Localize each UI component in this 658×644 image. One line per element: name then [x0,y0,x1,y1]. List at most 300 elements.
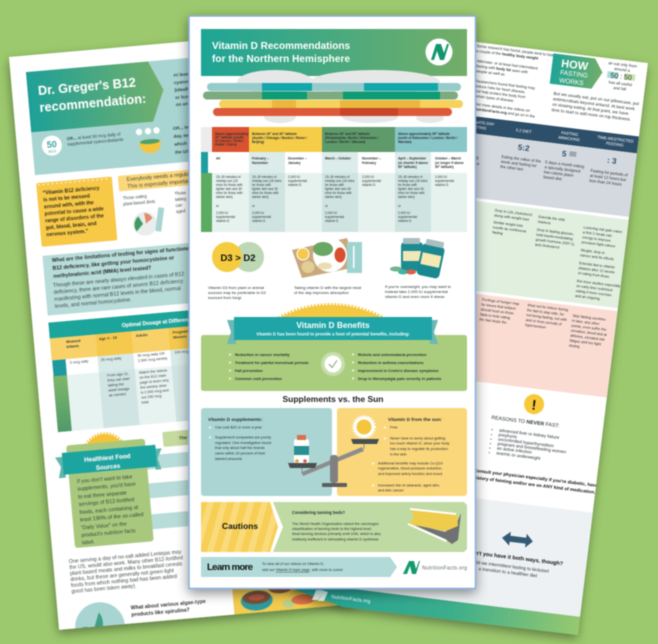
text: reasons to never fast: uncontrolled hyperthyroidism [498,437,554,448]
text: overweight: instead take 2,000 IU supplemental [385,289,448,294]
icon: sun rays over benefits banner [277,302,386,318]
icon: tanning bed [408,508,461,544]
logo: NutritionFacts.org: NutritionFacts.org [422,566,467,572]
text: weight intro: Some research has found, people tend to lose [477,44,554,57]
table: recommendations by latitude: vitamin D [435,183,449,187]
panel: vitamin D supplements: Supplement companies are poorly [215,436,271,440]
text: overweight: If you're overweight, you may want to [385,284,452,289]
text: lentejas paragraph: good has been taken away). [71,583,137,595]
map: latitude bands [203,70,463,123]
table: optimal dosage: is 2,500 mcg and [141,388,169,395]
heading: vitamin D recommendations: for the Northern Hemisphere [212,54,350,65]
panel: vitamin D from the sun: regeneration, blood pressure reduction, [378,466,442,470]
text: overweight [385,284,452,299]
list: food source stripes: *Only some [201,528,217,533]
text: D3 preferable: sources may be preferable to D2 [208,290,267,295]
panel: vitamin D from the sun: Free [390,426,398,430]
list: benefits right: Reduction in asthma exacerbations [358,360,424,365]
table: optimal dosage: 2,500 mcg weekly [138,356,168,363]
list: benefits left: Treatment for painful menstrual periods [235,360,309,365]
table: recommendations by latitude: (or longer if above [435,161,464,165]
table: green benefits row: precision fight cancer [581,240,616,248]
panel: left page, B12 recommendation [9,31,361,644]
list: food source stripes: Trader Joe's [196,450,225,458]
text: OR block: which contains [173,139,207,147]
list: benefits left [235,352,309,381]
table: recommendations by latitude [201,127,467,232]
text: weight intro: fasting with body fat seen with [476,64,528,74]
table: pink risks row: fatigue and too tight [569,339,601,346]
text: weight intro: people as well as [475,69,505,77]
text: at least block: or lozenge) [175,93,200,100]
list: benefits right: Improvement in Crohn's disease symptoms [358,368,438,373]
table: grey description row: 5 [562,149,568,159]
table: green benefits row: and an ongoing [575,294,600,301]
table: green benefits row: on early time restricted [576,284,613,292]
table: recommendations by latitude: mins for those with [325,191,352,195]
callout: 50 : 50: an eat only from [608,60,638,69]
panel: limitations of testing: What are the limitations of testing for signs of functional [52,246,191,264]
table: recommendations by latitude: November – [362,156,381,160]
panel: vitamin D supplements [201,408,332,496]
callout: yellow quote: nervous system.” [46,229,89,238]
icon: check [321,352,345,376]
label: cautions chevron [201,502,278,552]
text: consult your physician: history of fainting and/or are on ANY kind of medication. [473,475,596,495]
table: recommendations by latitude: 15–30 minutes of [398,175,423,179]
callout: 50 : 50: has all useful [608,79,632,87]
panel: learn more: Learn more [207,562,253,573]
table: recommendations by latitude: (or shorter if above [398,161,428,165]
table: recommendations by latitude: April – September [398,156,427,160]
panel: both ways: Could we intermittent fasting to kickstart [468,559,550,574]
table: recommendations by latitude: January [288,161,301,165]
heading: Dr. Greger's B12 recommendation: Dr. Greger's B12 [37,76,136,98]
banner: benefits title [227,317,438,344]
table: green benefits row [476,201,628,308]
callout: yellow quote: potential to cause a wide [44,206,104,217]
table: recommendations by latitude: supplemental [435,179,454,183]
list: benefits left: Reduction in cancer mortality [235,352,291,357]
table: pink risks row: Feelings of hunger may [482,298,520,306]
icon: algae circle [74,602,126,629]
panel: vitamin D supplements: Can cost $10 or more a year [215,426,263,430]
panel: healthiest food sources text: label. [82,539,95,546]
table: green benefits row: markers [538,220,551,225]
list: benefits right: Rickets and osteomalacia prevention [358,352,427,357]
table: pink risks row: Must not be indoor during [527,303,568,312]
banner: healthiest food sources: Sources [96,463,121,472]
text: weight intro [469,44,554,120]
table: recommendations by latitude: (Austin / Chicago / Boston / Rome / [252,136,307,140]
text: lentejas paragraph: One serving a day of no-salt added Lentejas may [69,549,182,565]
panel: limitations of testing: manifesting with normal B12 levels in the blood, normal [54,286,181,303]
text box: but we usually eat: antimicrobials beyond antacid. At best work [553,96,636,111]
callout: everybody needs a regular source [117,169,189,192]
text box: but we usually eat [551,91,640,123]
table: green benefits row: growth hormone (IGF-1), [535,238,575,246]
panel: vitamin D from the sun: has a way to regulate its production [390,447,448,451]
panel: both ways [370,498,592,616]
callout: yellow quote: is not to be messed [43,193,90,204]
table: recommendations by latitude: darker skin) [398,195,415,199]
table: green benefits row: But more studies especially [577,279,621,288]
table: recommendations by latitude: 2,000 IU [435,175,448,179]
table: pink risks row: athletes, elevated risk [570,334,605,342]
table: pink risks row: dosing [569,343,580,349]
text box: but we usually eat: But we usually eat, put on our pillowcase, put [553,91,640,106]
panel: vitamin D from the sun: Vitamin D from the sun: [388,417,442,423]
icon: D3 > D2: D3 > D2 [220,253,256,264]
list: benefits left: Fall prevention [235,368,263,373]
table: pink risks row: hypertension [525,323,546,329]
panel: healthiest food sources text: foods, each containing at [79,505,139,516]
table: grey description row: (ADF) twice [458,159,480,166]
text: what about algae: products like spirulina? [131,607,190,618]
text: those eating plant-based diets: can [175,202,183,208]
table: optimal dosage: Women [173,335,188,340]
text: those eating plant-based diets: aged [176,208,186,214]
text: at least block: on an empty [176,100,203,107]
table: recommendations by latitude: October – March [435,156,461,160]
table: pink risks row: the fast stops the [479,317,507,325]
text box: the ...: The Best [179,434,199,441]
panel: healthiest food sources text [66,439,154,548]
table: recommendations by latitude: March – October [325,156,352,160]
icon: supplement bottles [390,238,446,279]
table: recommendations by latitude: mins for those with [398,191,425,195]
icon: D3 > D2 [212,242,264,272]
text: D3 preferable: Vitamin D3 from plant or animal [208,285,264,290]
text: those eating plant-based diets: Those eating [123,193,148,201]
table: grey description row: weight [455,182,468,189]
text box: the ... [162,429,189,448]
table: grey description row: week and fasting for [501,159,537,168]
text: tanning beds: classification of tanning beds to the highest level. [292,527,372,531]
icon: logo [426,38,452,66]
heading: how fasting works: HOW [561,58,589,73]
panel: vitamin D from the sun [337,408,467,496]
panel: healthiest food sources text: product's nutrition facts [81,528,136,539]
table: recommendations by latitude: for those with [398,183,417,187]
table: recommendations by latitude: vitamin D [288,183,302,187]
table: grey description row: 5:2 [517,143,531,153]
table: recommendations by latitude: vitamin D [216,219,230,223]
text: OR block: day, each at [173,132,200,139]
heading: vitamin D recommendations: Vitamin D Recommendations [212,41,350,52]
table: optimal dosage: the weekly dose [140,384,167,390]
text: 50 mcg daily: OR... at least 50 mcg daily of [67,132,121,141]
text: lentejas paragraph: plant-based meats and milks to breakfast cereals [70,561,183,577]
text: weight intro: Researchers found that fasting may [475,79,535,90]
heading: how fasting works [550,53,604,90]
callout: 50 : 50: around a [614,66,631,73]
table: green benefits row: Weight, drop in [580,248,605,255]
table: green benefits row: of eating from those [578,271,610,279]
table header row: ALTERNATE-DAY [462,118,495,127]
text: at least block [173,72,189,107]
table: green benefits row: energy to improve [582,235,611,243]
table: recommendations by latitude: vitamin D [252,219,266,223]
table: grey description row: restriction [457,171,475,178]
panel: vitamin D from the sun: in the skin [390,452,407,456]
callout: 50 : 50 [606,62,638,91]
banner: benefits title: Vitamin D has been found to provide a host of potential benefits, including: [256,332,410,336]
table: recommendations by latitude: 50° latitude) [435,165,454,169]
table: recommendations by latitude: mins for those with [252,191,279,195]
panel: healthiest food sources text: supplements, you'd have [77,482,136,493]
table: optimal dosage: Watch the videos [139,368,167,375]
table: pink risks row: in later, any other [572,319,600,326]
table: recommendations by latitude: 15–30 minutes of [325,175,350,179]
heading: vitamin D recommendations [201,29,467,76]
table: recommendations by latitude: December – [288,156,307,160]
table: pink risks row: elevation, blood and at [571,329,607,337]
table: grey description row: 5 days a month eating [545,159,585,169]
table: grey description row: at least 12 hours but [590,173,627,182]
callout: 50 : 50: and fall [613,85,627,92]
table: optimal dosage: on the B12 main [139,374,166,380]
text: tanning beds: Most tanning devices primarily emit UVA, which is also [292,532,381,536]
table: optimal dosage: total [141,400,149,405]
text: overweight: vitamin D and even more if obese [385,294,445,299]
table: grey description row: Fasting for periods of [590,168,629,177]
table: grey description row: 2 [465,134,471,145]
table: recommendations by latitude: November [252,161,269,165]
footer band: NutritionFacts.org: NutritionFacts.org [331,594,371,605]
label: cautions chevron: Cautions [222,521,258,531]
list: food source stripes: Bob's Red Mill [197,464,230,473]
panel: learn more: To view all of our videos on Vitamin D, [262,562,324,566]
heading: supplements vs the sun: Supplements vs. the Sun [282,394,384,404]
heading: how fasting works: FASTING [560,69,588,80]
panel: right page, how fasting works [282,26,654,635]
table: recommendations by latitude: 2,000 IU [398,211,411,215]
table: recommendations by latitude: Between 40° and 50° latitude [325,132,370,136]
text: weight intro: a couple of the healthy body weight [476,49,539,61]
icon: balance scale [288,435,379,487]
table: optimal dosage: 5 mcg daily [70,359,89,365]
table: optimal dosage [48,310,189,433]
text: reasons to never fast: an active infection [497,445,533,455]
text: OR block: the US [175,149,189,155]
table: green benefits row: a first 2 meals can [583,230,612,238]
text: largest meal: Taking vitamin D with the largest meal [294,285,361,290]
text: those eating plant-based diets: Those [174,190,187,196]
list: food source stripes: Red Star [199,480,219,488]
table: recommendations by latitude: darker skin) [216,195,233,199]
table: recommendations by latitude: for those with [252,183,271,187]
icon: 50 mcg badge: 50 [46,139,57,150]
table: recommendations by latitude: Above approximately [215,132,249,136]
table: recommendations by latitude: Warsaw) [398,140,411,144]
panel: limitations of testing: methylmalonic acid (MMA) level tested? [53,265,152,280]
table: grey description row: a specially designed [544,164,581,174]
table: recommendations by latitude: 20° latitude (south [215,136,244,140]
table: recommendations by latitude: supplemental [216,215,235,219]
panel: vitamin D from the sun: and improved artery function and mood [378,472,442,476]
table: green benefits row: along with weight loss [494,213,529,222]
table: recommendations by latitude: lighter skin and 30 [252,187,278,191]
table: grey description row: : 3 [607,156,618,166]
panel: vitamin D benefits [201,317,467,391]
table: recommendations by latitude: lighter skin and 30 [398,187,424,191]
text box: but we usually eat: time to start to add more on top thickness. [551,107,631,122]
table: recommendations by latitude: (north of Edmonton / London / Berlin / [398,136,458,140]
table: pink risks row [476,294,618,398]
icon: meal tray [292,238,362,278]
panel: healthiest food sources text: “Daily Value” on the [81,521,127,531]
table: recommendations by latitude: Beijing) [252,140,264,144]
text: reasons to never fast [487,415,570,464]
table: recommendations by latitude: vitamin D [325,219,339,223]
icon: warning: ! [531,396,537,413]
table: recommendations by latitude: 15–30 minutes of [216,175,241,179]
table: optimal dosage: page to learn why [140,378,169,385]
callout: 50 : 50: 50 : 50 [610,73,632,82]
table header row: FASTING [469,124,487,131]
panel: vitamin D from the sun: Increased risk of cataracts, aged skin, [378,484,440,488]
panel: center page, vitamin D recommendations [189,16,476,588]
table: recommendations by latitude: darker skin) [252,195,269,199]
list: food source stripes: NOW Foods [200,495,228,503]
icon: 50 mcg badge [41,135,63,156]
table: recommendations by latitude: 2,000 IU [216,211,229,215]
table: grey description row: low-calorie plant- [544,169,575,178]
table: optimal dosage: they can start [107,377,130,383]
table: optimal dosage: 100 mcg daily [174,349,197,355]
text: those eating plant-based diets [122,191,187,214]
table: recommendations by latitude: or [398,204,402,208]
table: optimal dosage: 25 mcg daily [101,356,122,362]
list: benefits left: Common cold prevention [235,376,283,381]
callout: everybody needs a regular source: Everybody needs a regular [126,172,191,183]
table: recommendations by latitude: supplemental [288,179,307,183]
text: weight intro: Get more details in the videos on [474,102,530,113]
table: recommendations by latitude: 2,000 IU [325,211,338,215]
table: recommendations by latitude: All [216,156,220,160]
banner: healthiest food sources: Healthiest Food [84,453,131,464]
panel: limitations of testing [42,242,189,316]
text: tanning beds [292,510,381,542]
table: recommendations by latitude: February – [252,156,269,160]
table: recommendations by latitude: or [325,204,329,208]
text: OR block [172,126,189,154]
banner: benefits title: Vitamin D Benefits [296,320,370,330]
text: D3 preferable: sourced from fungi [208,295,241,300]
table: optimal dosage: From age 11, [107,372,129,378]
table: pink risks row: be issues that subject [481,303,516,311]
table: recommendations by latitude: lighter skin and 30 [325,187,351,191]
table: recommendations by latitude: midday sun (15 mins [325,179,355,183]
table: recommendations by latitude: vitamin D [398,219,412,223]
table: optimal dosage: 50 mcg daily OR [137,352,165,358]
table: green benefits row: Drop in LDL cholesterol [495,208,532,217]
panel: vitamin D supplements: came within 10 percent of their [215,452,266,456]
table: recommendations by latitude: supplemental [252,215,271,219]
table: recommendations by latitude: 15–30 minutes of [252,175,277,179]
table: recommendations by latitude: 2,000 IU [362,175,375,179]
table: green benefits row: total insulin-modulating [536,233,573,241]
panel: learn more: visit our Vitamin D topic page, with more to come! [262,568,343,572]
panel: healthiest food sources text: to eat three separate [78,490,127,500]
list: food source stripes: 2 mcg [209,502,217,506]
panel: healthiest food sources text: least 190% of the so-called [80,512,144,524]
panel: healthiest food sources text: If you don't want to take [77,474,133,485]
text: at least block: At least once [173,70,202,78]
panel: limitations of testing: B12 deficiency, like getting your homocysteine or [52,255,174,272]
table: recommendations by latitude: London / Berlin / Warsaw) [325,140,365,144]
panel: vitamin D supplements: Vitamin D supplements: [208,417,263,423]
table: recommendations by latitude: of Cancun / Delhi / [215,139,244,143]
table: green benefits row: Lowering risk gain eaten [583,225,622,234]
table: green benefits row: fasting [492,230,503,236]
table: grey description row: Alternate [460,147,477,154]
table: grey description row: less than 24 hours [589,178,622,187]
panel: limitations of testing: levels, and normal homocysteine. [55,297,132,310]
text: weight intro: and help protect the body from [474,89,526,99]
table: optimal dosage: Age 4 - 18 [99,336,117,341]
table: recommendations by latitude: mins for those with [216,191,243,195]
table: grey description row: eating, [456,177,469,183]
text: at least block: (ideally chewable [174,84,213,93]
table: recommendations by latitude: vitamin D [362,183,376,187]
table: green benefits row: Drop in fasting glucose, [537,228,574,236]
panel: limitations of testing: deficiency, there are rare cases of severe B12 deficiency [53,279,184,296]
list: benefits right: Drop in fibromyalgia pain severity in patients [358,376,441,381]
text: reasons to never fast: porphyria [498,432,518,439]
text: lentejas paragraph: drinks, but these are generally not green light [70,568,175,583]
panel: healthiest food sources text: servings of B12-fortified [79,497,135,508]
table: recommendations by latitude: (Philadelphia / Berlin / Edmonton / [325,136,379,140]
list: food source stripes: 12 mcg [207,486,218,491]
table: recommendations by latitude: supplemental [398,215,417,219]
callout: yellow quote [36,176,117,247]
text: weight intro: Alternate- or at least fast intermittent [477,59,539,71]
table: optimal dosage: Weaned [66,339,81,344]
table: green benefits row: Extends last to vitamin [579,261,615,269]
icon: sun on scale [354,416,374,438]
text: 50 mcg daily: supplemental cyanocobalamin [67,137,124,147]
panel: both ways: Why can't you have it both ways, though? [456,548,563,567]
image: food footer [232,588,338,616]
text: at least block: cyanocobalamin [174,77,210,85]
icon: sun behind healthiest banner [84,432,123,444]
list: benefits right [358,352,441,381]
panel: limitations of testing: Though these are nearly always elevated in cases of B12 [53,272,185,289]
icon: 50 mcg badge: MCG [48,149,57,154]
panel: both ways: a transition to a healthier diet [478,566,538,578]
table: pink risks row: should food on those [480,307,514,316]
text: what about algae [131,599,207,618]
panel: vitamin D from the sun: and skin cancer [378,488,405,492]
text: those eating plant-based diets: taking [175,196,187,202]
text: lentejas paragraph: the US, would also work. Many other B12-fortified [69,555,183,571]
text: largest meal: of the day improves absorption [294,290,349,295]
header panel: light teal backdrop [30,58,189,176]
heading: how fasting works: WORKS [559,77,585,87]
table header row: FASTING [561,130,579,137]
callout: yellow quote: gut, blood, brain, and [46,221,97,231]
table: optimal dosage: Adults [136,333,148,338]
table: grey description row [476,134,637,217]
list: food source stripes: Series food [201,533,217,538]
table header row: MIMICKING [558,135,580,142]
table: recommendations by latitude: February [362,161,376,165]
footer band: NutritionFacts.org [293,581,580,635]
table: optimal dosage: Pregnant [172,329,190,335]
text: tanning beds: Considering tanning beds? [292,510,345,515]
